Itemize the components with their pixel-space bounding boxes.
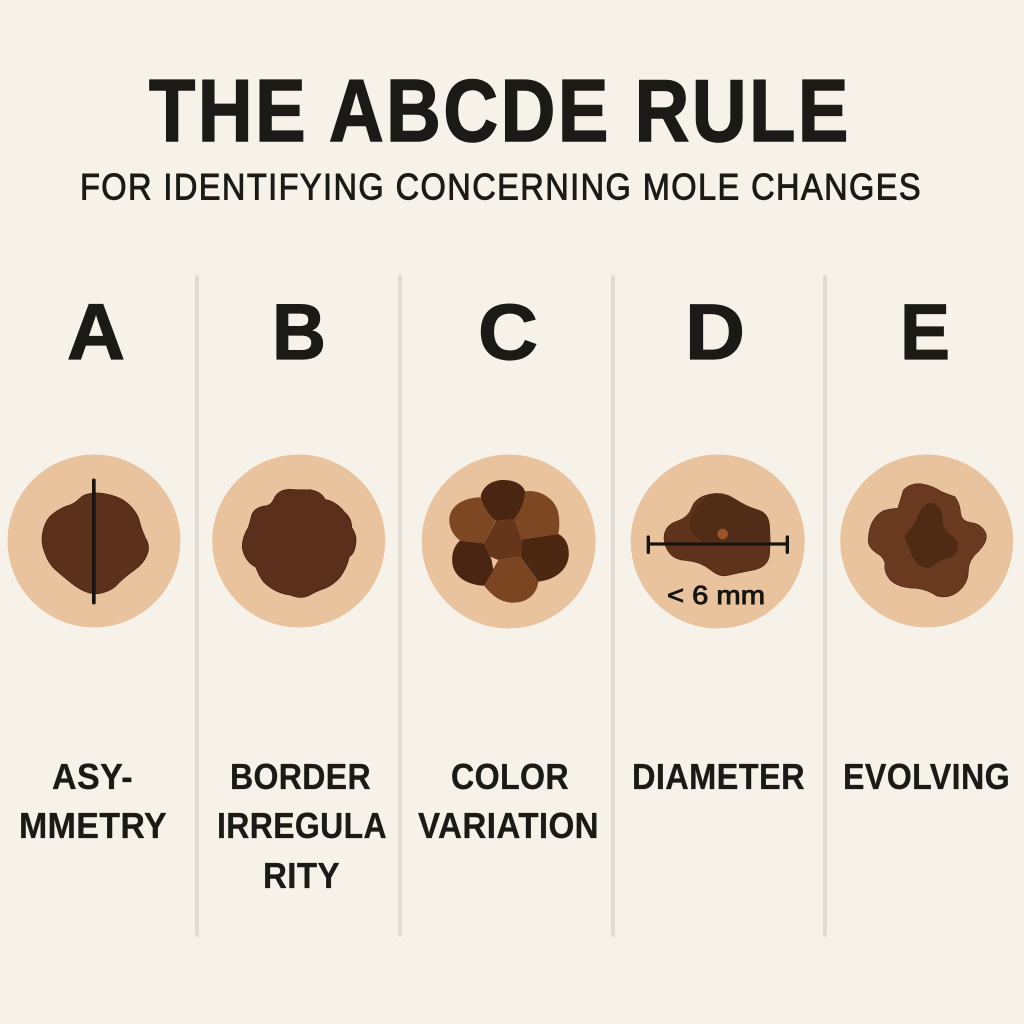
letter C: C	[478, 287, 538, 376]
label: asymmetry: MMETRY	[19, 805, 167, 846]
label: border irregularity: BORDER	[230, 756, 371, 797]
letter A: A	[67, 287, 125, 376]
label: color variation: VARIATION	[418, 805, 599, 846]
panel: C color variation	[418, 287, 599, 846]
letter E: E	[900, 287, 950, 376]
label: border irregularity: IRREGULA	[217, 805, 387, 846]
panel: D diameter	[631, 287, 805, 797]
measurement label: < 6 mm	[667, 580, 765, 610]
panel: B border irregularity	[212, 287, 387, 896]
label: asymmetry	[19, 756, 167, 846]
title: THE ABCDE RULE	[149, 61, 851, 160]
label: evolving: EVOLVING	[843, 756, 1010, 797]
label: color variation: COLOR	[451, 756, 569, 797]
subtitle: FOR IDENTIFYING CONCERNING MOLE CHANGES	[80, 166, 922, 208]
icon: mole with colour segments	[422, 454, 596, 628]
label: border irregularity: RITY	[263, 855, 340, 896]
icon: mole with irregular border	[212, 454, 385, 628]
letter B: B	[272, 287, 326, 376]
label: border irregularity	[217, 756, 387, 896]
panel: A asymmetry	[8, 287, 180, 846]
letter D: D	[685, 287, 745, 376]
label: color variation	[418, 756, 599, 846]
icon: evolving mole with darker centre	[840, 454, 1013, 628]
icon: asymmetric mole with axis line	[8, 454, 180, 628]
panel: E evolving	[840, 287, 1013, 797]
label: diameter: DIAMETER	[632, 756, 805, 797]
icon: mole with diameter measure	[631, 454, 805, 628]
label: asymmetry: ASY-	[52, 756, 133, 797]
